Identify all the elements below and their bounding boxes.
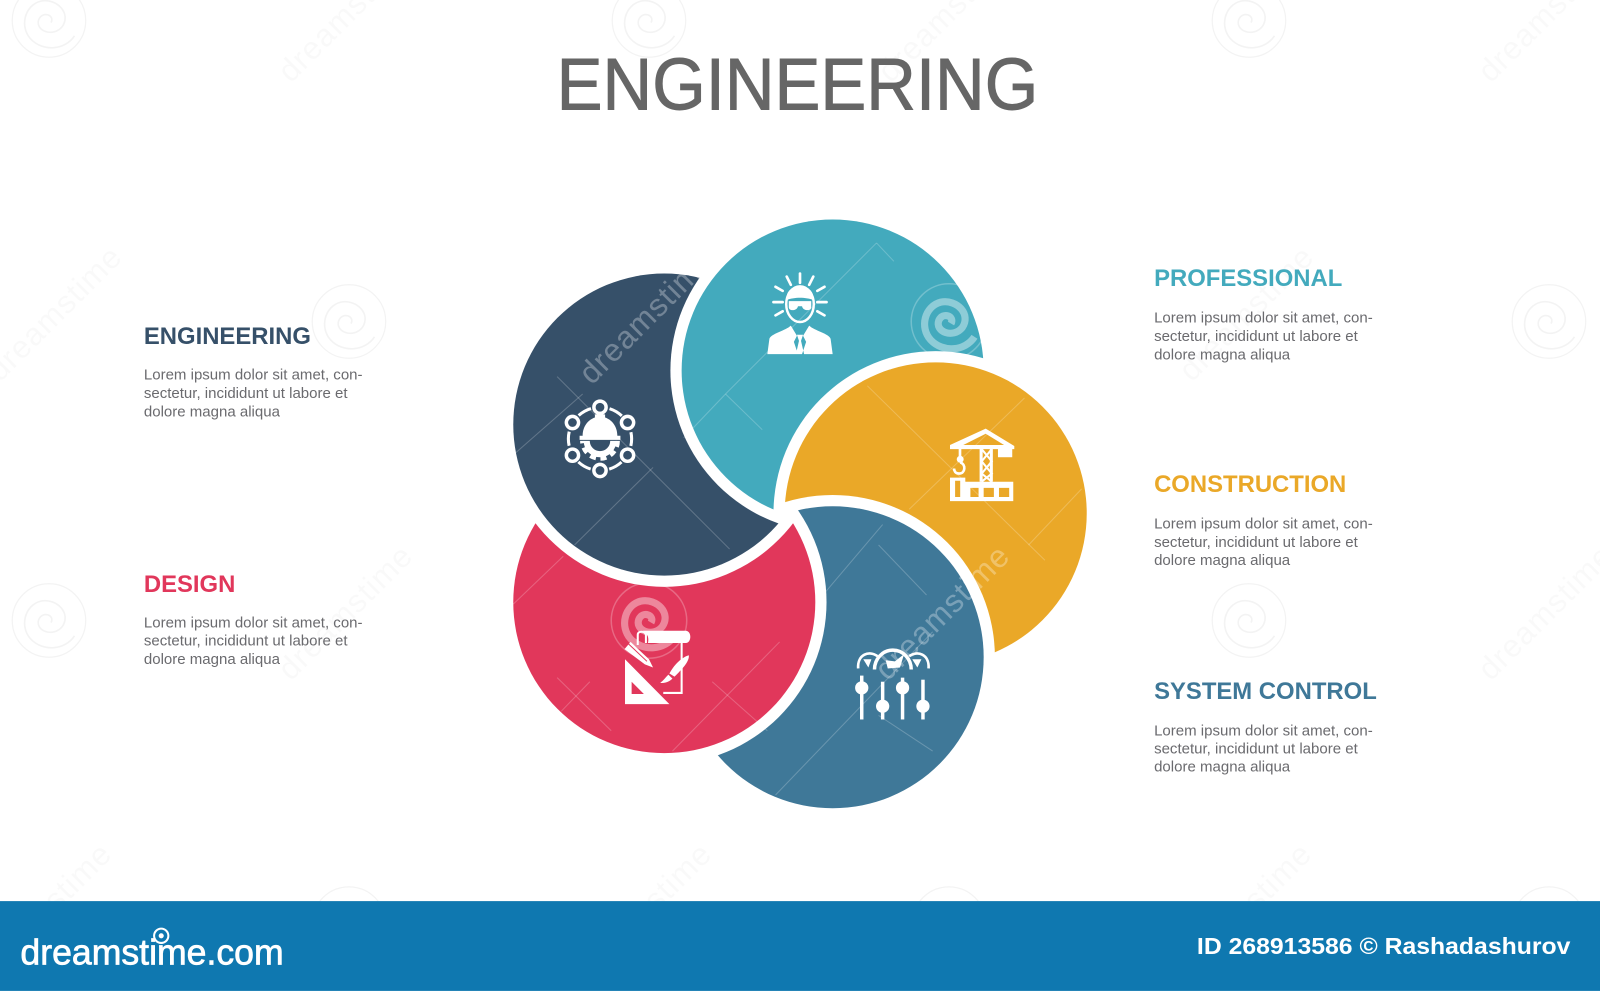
segment: system control (blue) [718,506,984,808]
watermark pattern on white: dreamstime [1171,238,1321,388]
heading: system control: SYSTEM CONTROL [1154,678,1377,705]
description: system control: Lorem ipsum dolor sit amet, con- [1154,722,1373,739]
heading: design: DESIGN [144,571,235,598]
watermark pattern on white: dreamstime [270,537,420,687]
heading: professional: PROFESSIONAL [1154,265,1342,292]
description: system control: dolore magna aliqua [1154,759,1291,776]
icon: professional with sunglasses and idea rays [767,274,833,354]
description: construction: Lorem ipsum dolor sit amet, con- [1154,516,1373,533]
swirl diagram [513,219,1087,808]
description: professional: sectetur, incididunt ut labore et [1154,328,1359,345]
description: professional: Lorem ipsum dolor sit amet, con- [1154,310,1373,327]
description: design: Lorem ipsum dolor sit amet, con- [144,615,363,632]
heading: construction: CONSTRUCTION [1154,471,1346,498]
description: professional: dolore magna aliqua [1154,346,1291,363]
segment: design (red) [513,523,816,754]
text block: engineering [144,323,363,420]
description: engineering: sectetur, incididunt ut labore et [144,385,348,402]
text block: professional [1154,265,1373,363]
text block: system control [1154,678,1377,776]
watermark: dreamstime text and spirals on diagram: dreamstime [571,241,721,391]
segment: engineering (navy) [513,274,778,576]
footer bar [0,901,1600,991]
icon: sliders and gauges [855,650,930,719]
segment: construction (orange) [785,362,1087,664]
icon: design paper, ruler, pencil and brush [624,631,690,704]
description: engineering: Lorem ipsum dolor sit amet, con- [144,367,363,384]
watermark: dreamstime text and spirals on diagram: dreamstime [867,537,1017,687]
description: construction: dolore magna aliqua [1154,552,1291,569]
description: engineering: dolore magna aliqua [144,403,281,420]
description: design: sectetur, incididunt ut labore et [144,633,348,650]
icon: tower crane and building [950,429,1014,501]
heading: engineering: ENGINEERING [144,323,311,350]
text block: design [144,571,363,668]
title: ENGINEERING [557,42,1038,125]
icon: engineering helmet, gear and network [566,401,634,477]
segment: professional (teal) [682,219,984,522]
footer logo: dreamstime.com: dreamstime.com [20,932,284,972]
watermark: dreamstime text and spirals on diagram [571,241,1017,687]
footer credit: ID 268913586 © Rashadashurov [1197,933,1570,959]
watermark lines over the diagram [513,243,1082,795]
description: system control: sectetur, incididunt ut labore et [1154,741,1359,758]
text block: construction [1154,471,1373,569]
watermark pattern on white: dreamstime [569,835,719,985]
watermark pattern on white: dreamstime [1169,835,1319,985]
description: construction: sectetur, incididunt ut labore et [1154,534,1359,551]
description: design: dolore magna aliqua [144,651,281,668]
